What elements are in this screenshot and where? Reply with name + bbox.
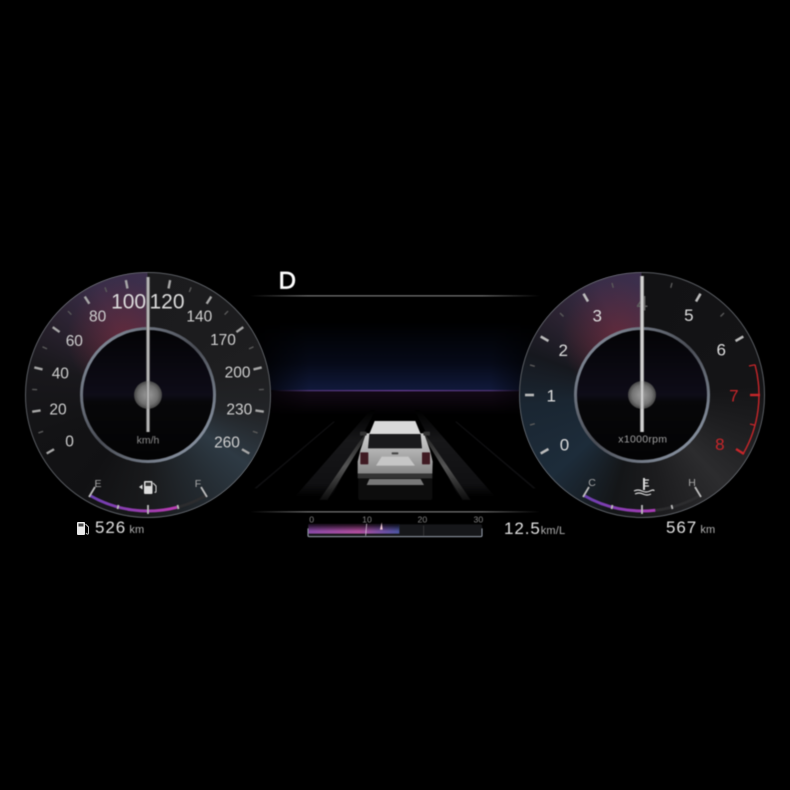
fuel arc gauge: F [194,477,201,489]
outer rim [519,272,764,517]
speed labels: 140 [186,308,212,325]
rpm labels [546,292,738,454]
speed labels: 40 [51,365,69,382]
redline zone [736,364,760,454]
gauge labels: 20 [418,515,427,525]
gauge labels [309,515,483,525]
tail lights [360,452,368,464]
rpm labels: 4 [636,292,648,315]
speed labels: 60 [65,332,83,350]
gauge fill [309,524,399,534]
panel: speedometer dial [24,272,272,518]
rpm minor ticks [529,282,724,425]
gauge labels: 0 [309,515,314,525]
tailgate panel [376,457,415,466]
temperature arc gauge [582,476,700,514]
rpm labels: 7 [729,386,738,405]
gauge track [308,524,482,536]
inner ring [81,328,214,461]
speed labels: 260 [214,434,240,451]
top divider line [250,295,540,296]
gauge labels: 30 [474,515,483,525]
fuel arc gauge [89,477,207,514]
fuel arc gauge: E [94,477,101,489]
car lower shadow and wheels [358,473,432,500]
gauge ticks [366,524,367,536]
sky glow [250,322,550,391]
needle [146,276,149,432]
fuel economy readout: 12.5km/L [504,519,565,538]
rear window [368,434,422,448]
rpm major ticks [524,293,743,453]
inner ring [575,328,708,461]
fuel economy gauge [308,515,483,537]
road lanes [254,410,536,500]
lower bumper [358,474,432,478]
speed labels [49,290,252,451]
temperature arc gauge: C [588,476,596,488]
mirrors [360,432,367,436]
needle [640,276,644,432]
speed labels: 230 [226,401,252,418]
rpm labels: 3 [592,306,601,325]
icon: fuel pump small [77,522,89,535]
rpm labels: 8 [715,434,724,454]
hub [628,380,656,408]
speed labels: 100 [111,290,146,313]
speed labels: 120 [149,290,184,313]
panel: tachometer dial [518,272,766,518]
hub [134,380,162,408]
speed labels: 0 [65,433,74,450]
speed minor ticks [32,287,264,432]
unit label x1000rpm: x1000rpm [618,433,667,445]
rpm labels: 2 [558,340,567,360]
rpm labels: 0 [559,435,569,454]
speed labels: 200 [224,364,251,381]
rpm labels: 6 [716,340,725,359]
icon: coolant thermometer [634,478,654,494]
range readout right: 567 km [666,518,715,537]
rpm labels: 1 [546,386,555,405]
horizon line [270,390,530,391]
gear indicator: D [279,267,296,294]
bottom divider line [250,511,540,512]
rpm labels: 5 [684,306,693,324]
range readout left: 526 km [95,518,144,537]
ground tint [250,392,550,415]
outer rim [25,272,270,517]
panel: centre driving scene [256,267,534,538]
speed labels: 20 [49,401,67,418]
temperature arc gauge: H [688,476,695,488]
speed major ticks [32,280,263,453]
speed labels: 80 [89,308,106,325]
car body [358,433,433,474]
car rear view [358,421,433,500]
gauge labels: 10 [362,515,372,525]
speed labels: 170 [210,332,236,348]
roof [369,421,421,434]
unit label km/h: km/h [136,434,159,446]
icon: fuel pump with side arrow [139,480,156,494]
